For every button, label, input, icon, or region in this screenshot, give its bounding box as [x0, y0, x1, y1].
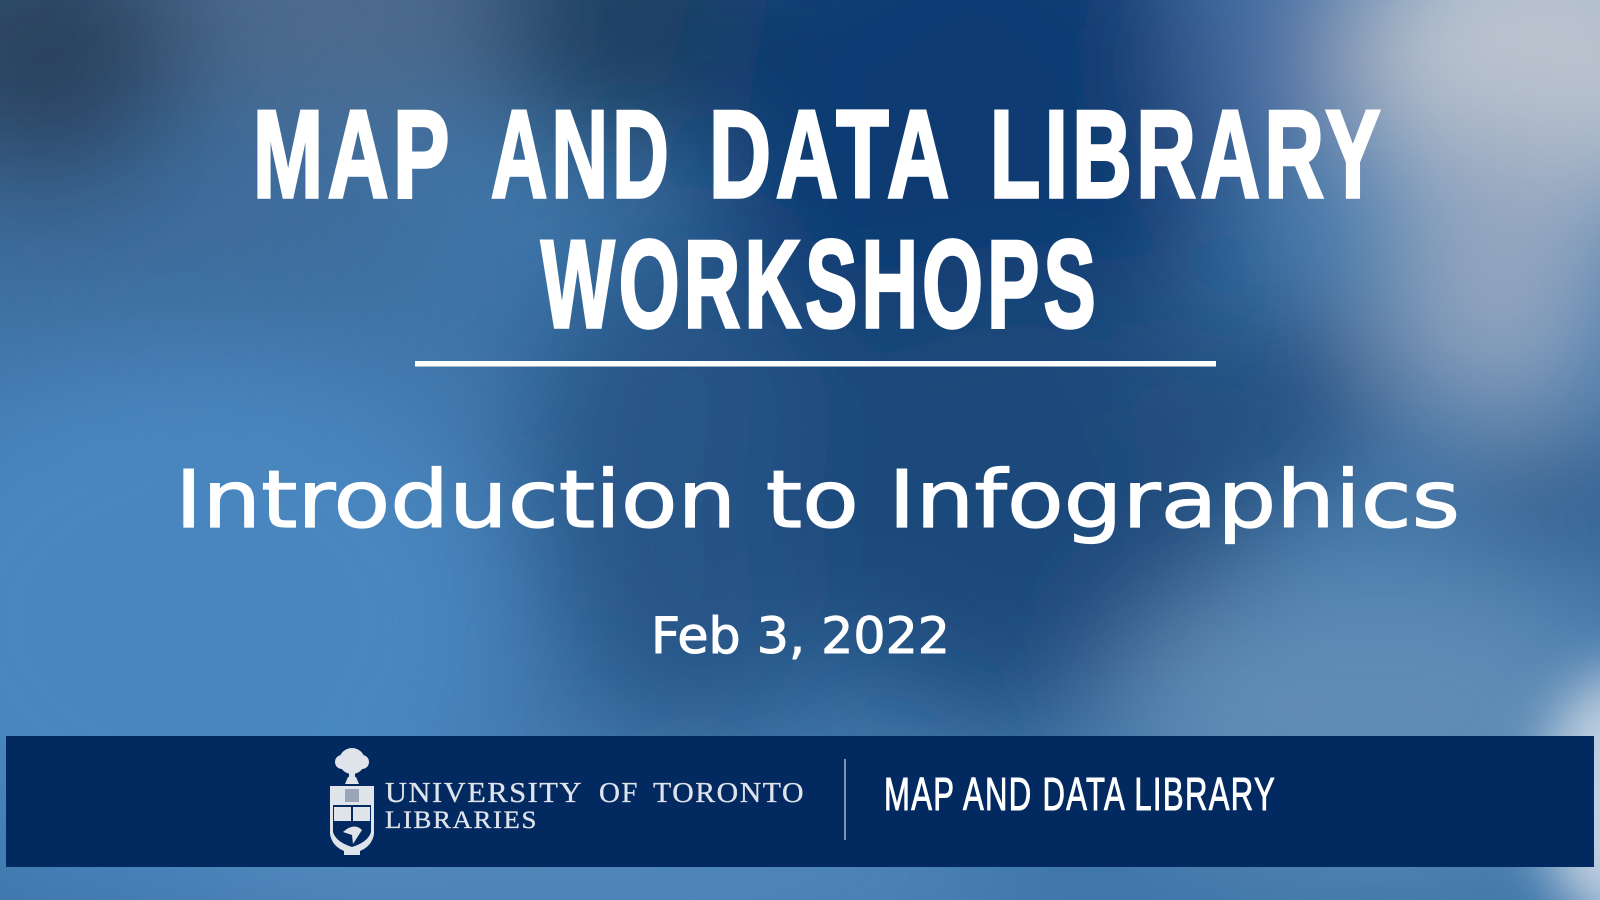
logo text: University of Toronto Libraries: [385, 777, 805, 834]
title: MAP: [253, 86, 454, 224]
logo text: University of Toronto Libraries: OF: [599, 777, 639, 809]
title: LIBRARY: [990, 86, 1385, 224]
date: Feb 3, 2022: [651, 607, 950, 665]
title: [253, 86, 1385, 354]
title: AND: [491, 86, 673, 224]
logo text: Map and Data Library: MAP AND DATA LIBRARY: [884, 768, 1276, 820]
logo text: University of Toronto Libraries: LIBRARIES: [385, 807, 538, 834]
logo text: University of Toronto Libraries: TORONTO: [653, 777, 805, 809]
title: WORKSHOPS: [541, 216, 1100, 354]
divider: [844, 759, 846, 840]
footer banner: [6, 736, 1594, 867]
icon: university crest: [330, 748, 374, 855]
logo text: University of Toronto Libraries: UNIVERSITY: [385, 777, 583, 809]
title underline: [415, 361, 1216, 366]
title: DATA: [709, 86, 954, 224]
subtitle: Introduction to Infographics: [175, 454, 1460, 546]
